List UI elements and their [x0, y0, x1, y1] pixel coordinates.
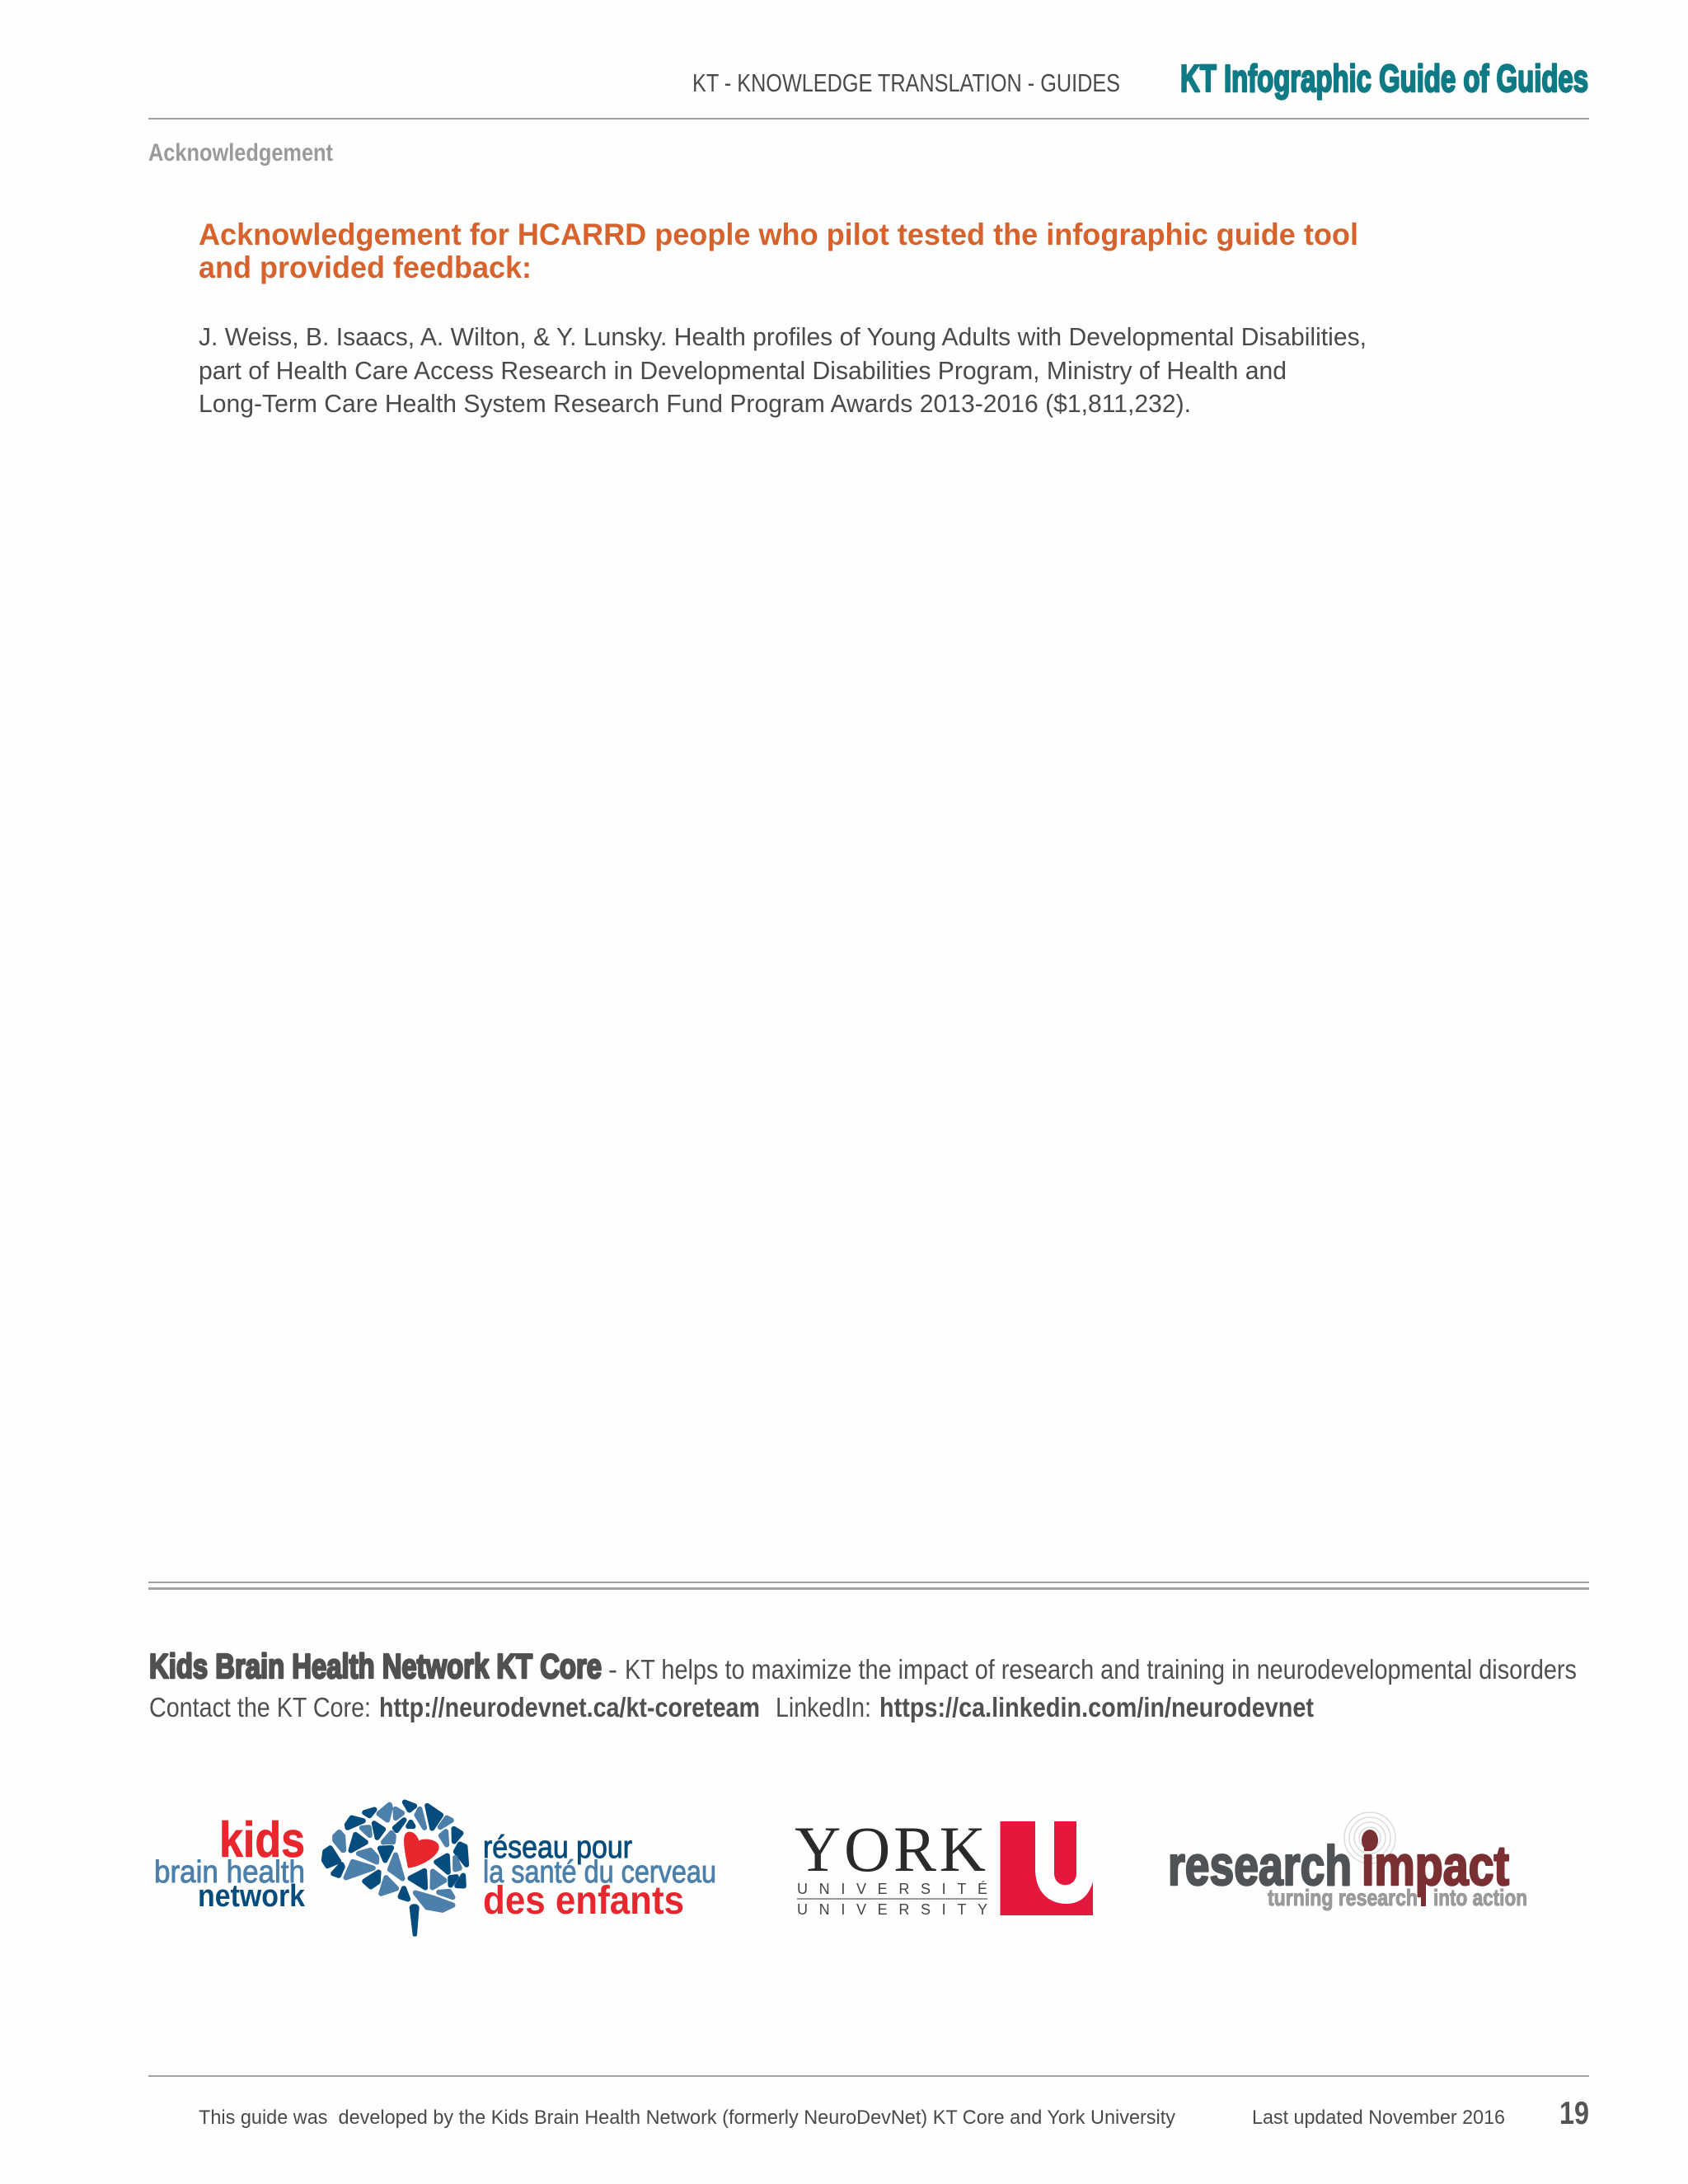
KT Core contact line: http://neurodevnet.ca/kt-coreteam [379, 1692, 760, 1722]
logo: York University: YORK [795, 1813, 986, 1885]
icon: brain with heart [324, 1802, 467, 1935]
KT Core contact line [149, 1692, 1314, 1722]
header: guide label: KT - KNOWLEDGE TRANSLATION - GUIDES [692, 68, 1120, 97]
icon: heart [404, 1832, 439, 1868]
acknowledgement heading: and provided feedback: [199, 251, 532, 284]
logo: kids brain health network [154, 1802, 716, 1935]
logo: kids brain health network: la santé du cerveau [483, 1855, 716, 1890]
logo: kids brain health network: network [198, 1879, 306, 1914]
logo: research impact: into action [1433, 1885, 1527, 1910]
logo: research impact: impact [1362, 1835, 1509, 1897]
KT Core description: KT helps to maximize the impact of research and training in neurodevelopmental disorders [625, 1654, 1577, 1685]
icon: signal rings [1344, 1812, 1395, 1863]
footer: page number: 19 [1559, 2096, 1589, 2131]
logo: kids brain health network: kids [219, 1812, 305, 1868]
acknowledgement body text: Long-Term Care Health System Research Fund Program Awards 2013-2016 ($1,811,232). [199, 389, 1191, 418]
logo: York University: UNIVERSITÉ [797, 1881, 987, 1897]
logo: research impact: research [1168, 1835, 1352, 1897]
logo: kids brain health network: brain health [154, 1855, 305, 1890]
acknowledgement body text: part of Health Care Access Research in Developmental Disabilities Program, Ministry of Health and [199, 356, 1287, 385]
KT Core contact line: LinkedIn: [776, 1692, 871, 1722]
logo: York University: UNIVERSITY [797, 1901, 987, 1918]
icon: red York U [1001, 1821, 1094, 1915]
acknowledgement body text: J. Weiss, B. Isaacs, A. Wilton, & Y. Lunsky. Health profiles of Young Adults with Developmental Disabilities, [199, 322, 1367, 351]
footer: credit: This guide was developed by the Kids Brain Health Network (formerly NeuroDevNet) KT Core and York University [199, 2107, 1175, 2129]
footer: last updated: Last updated November 2016 [1252, 2107, 1505, 2129]
logo: research impact [1168, 1812, 1527, 1910]
acknowledgement heading: Acknowledgement for HCARRD people who pilot tested the infographic guide tool [199, 218, 1358, 251]
acknowledgement body text [199, 322, 1367, 418]
logo: research impact: turning research [1268, 1885, 1418, 1910]
acknowledgement heading [199, 218, 1358, 284]
KT Core contact line: Contact the KT Core: [149, 1692, 371, 1722]
KT Core description: Kids Brain Health Network KT Core [149, 1647, 602, 1685]
section label: Acknowledgement [148, 139, 333, 166]
logo: kids brain health network: réseau pour [483, 1830, 632, 1865]
KT Core description [149, 1647, 1577, 1685]
logo: kids brain health network: des enfants [483, 1879, 684, 1923]
KT Core contact line: https://ca.linkedin.com/in/neurodevnet [879, 1692, 1314, 1722]
KT Core description: - [608, 1654, 617, 1685]
logo: York University [795, 1813, 1094, 1918]
